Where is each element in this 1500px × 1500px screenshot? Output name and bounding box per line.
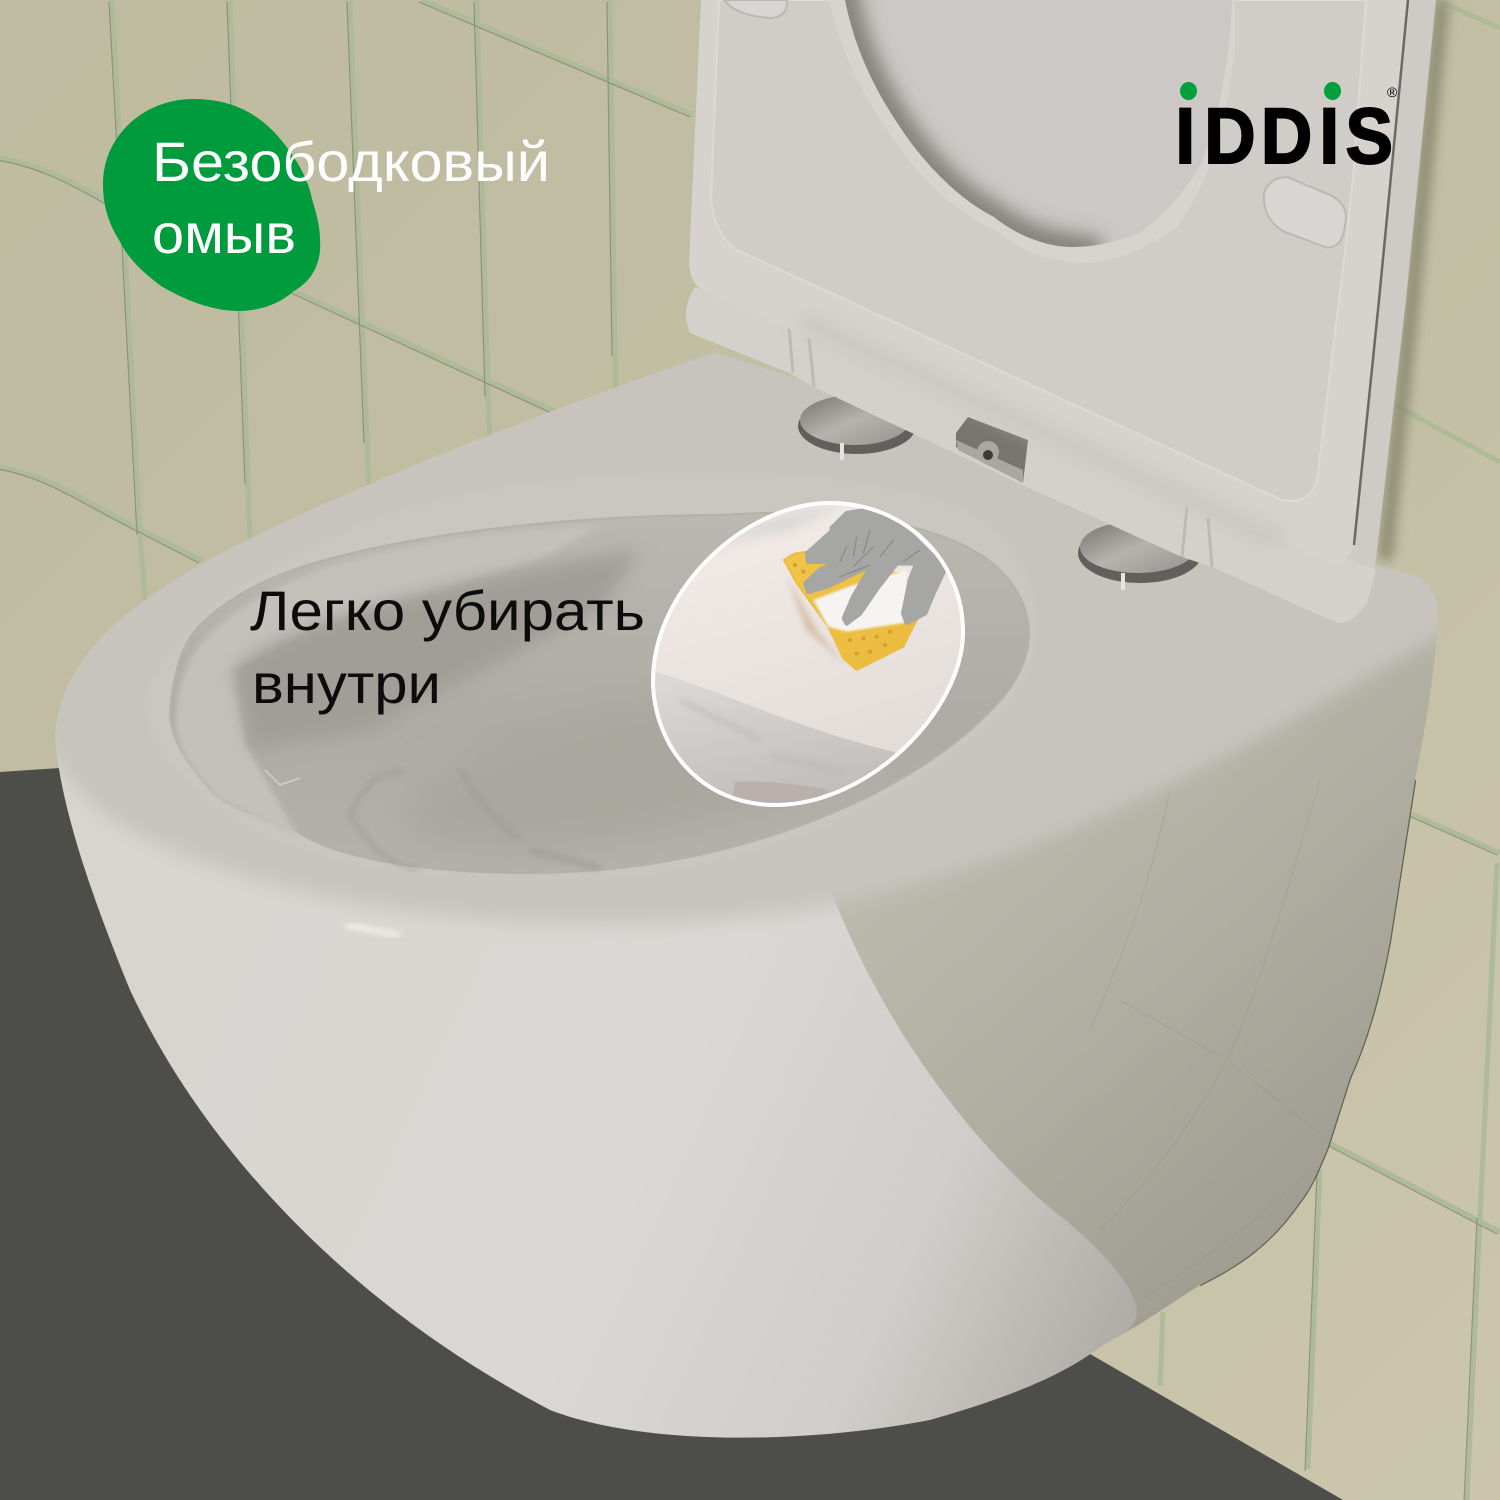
green blob badge xyxy=(103,99,320,311)
outer lid strip xyxy=(1340,0,1436,603)
caption: easy to clean: внутри xyxy=(252,652,441,715)
lower band xyxy=(655,672,895,796)
bowl right side xyxy=(834,636,1437,1334)
toilet seat lid xyxy=(686,0,1442,623)
logo: IDDIS: ® xyxy=(1387,84,1398,100)
inner lip xyxy=(175,525,600,840)
inner wall shadow xyxy=(234,550,640,748)
top bumper xyxy=(724,0,787,18)
wall shadow by lid xyxy=(1385,0,1442,560)
recess lower shading xyxy=(800,320,1282,540)
centre hinge clip xyxy=(956,417,1028,483)
gap line xyxy=(1354,0,1408,545)
floor xyxy=(0,768,1343,1500)
caption: easy to clean: Легко убирать xyxy=(250,579,645,642)
foam xyxy=(813,570,912,632)
lid opening xyxy=(845,0,1232,252)
lid body xyxy=(689,0,1410,562)
lid recess xyxy=(711,0,1366,501)
lip detail xyxy=(265,770,300,785)
upper inset reflection xyxy=(730,506,828,544)
water streaks xyxy=(352,816,598,872)
glaze highlight xyxy=(345,925,400,935)
heading: rimless flush xyxy=(152,130,550,265)
sponge xyxy=(784,552,931,670)
heading: rimless flush: Безободковый xyxy=(152,130,550,193)
sponge shadow xyxy=(788,582,839,659)
left disc xyxy=(798,398,916,454)
logo: IDDIS: IDDIS xyxy=(1175,92,1393,180)
sponge pores xyxy=(793,563,892,655)
heading: rimless flush: омыв xyxy=(152,202,296,265)
hinge bar xyxy=(686,287,1376,623)
wall contact shadow xyxy=(1200,780,1415,1285)
hinge discs xyxy=(798,395,1202,590)
right disc xyxy=(1078,523,1202,583)
lid bumper xyxy=(1264,177,1346,247)
glove xyxy=(806,510,945,623)
bowl front xyxy=(55,701,1137,1438)
bowl top surface xyxy=(30,330,1480,923)
faint tile reflections on side xyxy=(1090,780,1320,1180)
wall toilet bowl xyxy=(55,352,1438,1438)
inset: sponge cleaning xyxy=(640,500,963,830)
caption: easy to clean xyxy=(250,579,645,715)
rim outer band xyxy=(145,473,1037,882)
bowl opening xyxy=(170,513,1029,873)
inset ring xyxy=(653,503,963,805)
inset background xyxy=(653,503,963,805)
lid opening ring xyxy=(829,0,1235,263)
water shading xyxy=(440,792,684,836)
